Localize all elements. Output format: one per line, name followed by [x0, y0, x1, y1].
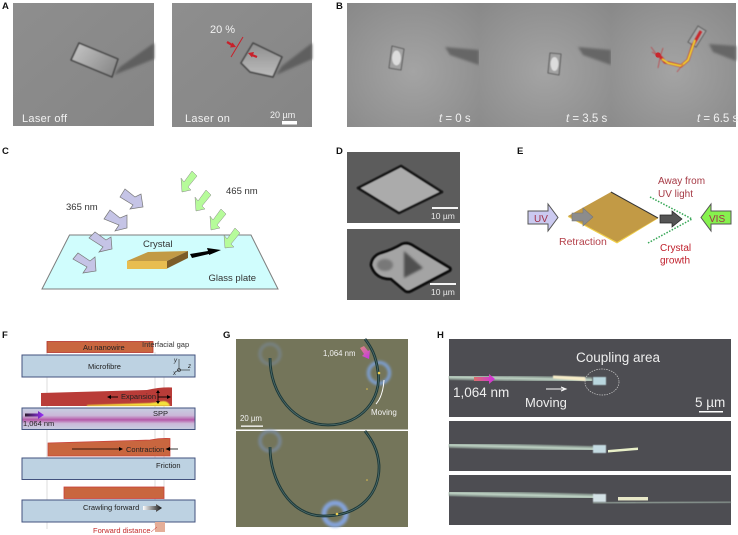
- arrow: 1,064 nm: [25, 411, 44, 419]
- panel: E: [517, 146, 731, 266]
- dotted wedge: [648, 197, 692, 243]
- micrograph: t = 6.5 s: t = 6.5 s: [697, 113, 738, 125]
- stage 2: expansion: 1,064 nm: [23, 419, 54, 428]
- stage 3: contraction: Contraction: [126, 445, 164, 454]
- text labels: 465 nm: [226, 186, 258, 197]
- micrograph: t = 3.5 s: [479, 3, 611, 127]
- panel: C: [2, 146, 278, 289]
- text labels: growth: [660, 256, 690, 266]
- caption: Laser on: Laser on: [185, 113, 230, 125]
- stage 1: Au nanowire on microfibre: [22, 340, 195, 377]
- stage 3: contraction: [22, 438, 195, 480]
- label: forward distance: Forward distance: [93, 526, 151, 535]
- label: F: F: [2, 330, 8, 341]
- axes: [172, 358, 191, 377]
- stage 1: Au nanowire on microfibre: Microfibre: [88, 362, 121, 371]
- text labels: [559, 176, 705, 266]
- micrograph: after: [347, 229, 460, 300]
- micrograph: top: [236, 339, 408, 430]
- micrograph: bottom: [236, 431, 408, 527]
- arrow: retraction: [572, 208, 593, 226]
- scale bar: 20 µm: [240, 414, 263, 427]
- micrograph: laser on: [172, 3, 312, 127]
- micrograph: top: Coupling area: [576, 350, 661, 365]
- micrograph: top: [449, 339, 731, 417]
- stage 2: expansion: SPP: [153, 409, 168, 418]
- purple arrows: 365 nm: [73, 189, 143, 273]
- micrograph: t = 6.5 s: [611, 3, 738, 127]
- panel: B: [336, 1, 738, 127]
- text labels: [66, 186, 258, 284]
- glass plate: [42, 235, 278, 289]
- micrograph: before: [347, 152, 460, 223]
- scale bar: 20 µm: 20 µm: [240, 414, 262, 423]
- label: A: A: [2, 1, 9, 12]
- label: B: B: [336, 1, 343, 12]
- label: E: E: [517, 146, 523, 157]
- arrow: growth: [660, 211, 682, 227]
- arrow: UV: [528, 204, 558, 231]
- axes: z: [187, 364, 191, 370]
- arrow: laser: [360, 346, 370, 359]
- arrow: moving: [376, 380, 384, 404]
- guide lines: [47, 341, 164, 529]
- micrograph: laser off: [13, 3, 154, 126]
- label: G: G: [223, 330, 230, 341]
- stage 1: Au nanowire on microfibre: Au nanowire: [83, 343, 125, 352]
- micrograph: bottom: [449, 475, 731, 525]
- scale bar: 10 µm: 10 µm: [431, 287, 455, 297]
- arrow: moving: [546, 387, 566, 391]
- marker: red line and arrows: [227, 37, 257, 58]
- crystal block: [127, 251, 188, 269]
- scale bar: 5 µm: 5 µm: [695, 395, 725, 410]
- panel: H: [437, 330, 731, 525]
- arrow: VIS: [701, 204, 731, 231]
- text labels: UV light: [658, 189, 693, 200]
- micrograph: top: Moving: [371, 408, 397, 417]
- text labels: Glass plate: [208, 273, 256, 284]
- stage 4: crawling forward: Crawling forward: [83, 503, 139, 512]
- micrograph: middle: [449, 421, 731, 471]
- stage 3: contraction: Friction: [156, 461, 181, 470]
- axes: y: [173, 358, 178, 364]
- scale bar: 10 µm: 10 µm: [431, 211, 455, 221]
- panel: G: [223, 330, 408, 527]
- callout: 20 %: 20 %: [210, 24, 235, 36]
- panel: F: [2, 330, 195, 535]
- arrow: crystal motion: [190, 248, 221, 258]
- micrograph: t = 0 s: t = 0 s: [439, 113, 471, 125]
- micrograph: t = 3.5 s: t = 3.5 s: [566, 113, 607, 125]
- stage 2: expansion: Expansion: [121, 392, 156, 401]
- arrow: VIS: VIS: [709, 214, 725, 225]
- label: interfacial gap: Interfacial gap: [142, 340, 189, 349]
- arrow: 1,064 nm: [474, 374, 495, 384]
- micrograph: top: 1,064 nm: [323, 349, 356, 358]
- label: C: C: [2, 146, 9, 157]
- text labels: Crystal: [143, 239, 173, 250]
- micrograph: top: 1,064 nm: [453, 385, 509, 400]
- label: H: H: [437, 330, 444, 341]
- micrograph: top: Moving: [525, 395, 567, 410]
- trajectory: red and yellow path: [651, 31, 701, 72]
- text labels: Away from: [658, 176, 705, 187]
- micrograph: t = 0 s: [347, 3, 479, 127]
- panel: D: [336, 146, 460, 300]
- caption: Laser off: Laser off: [22, 113, 68, 125]
- arrow: UV: UV: [534, 214, 548, 225]
- text labels: 365 nm: [66, 202, 98, 213]
- green arrows: 465 nm: [181, 171, 240, 248]
- text labels: Retraction: [559, 236, 607, 248]
- stage 4: crawling forward: [22, 487, 195, 535]
- axes: x: [172, 371, 177, 377]
- stage 2: expansion: [22, 387, 195, 430]
- label: D: D: [336, 146, 343, 157]
- crystal rhombus: [568, 192, 658, 243]
- text labels: Crystal: [660, 243, 691, 254]
- panel: A: [2, 1, 312, 127]
- scale bar: 20 µm: 20 µm: [270, 110, 295, 120]
